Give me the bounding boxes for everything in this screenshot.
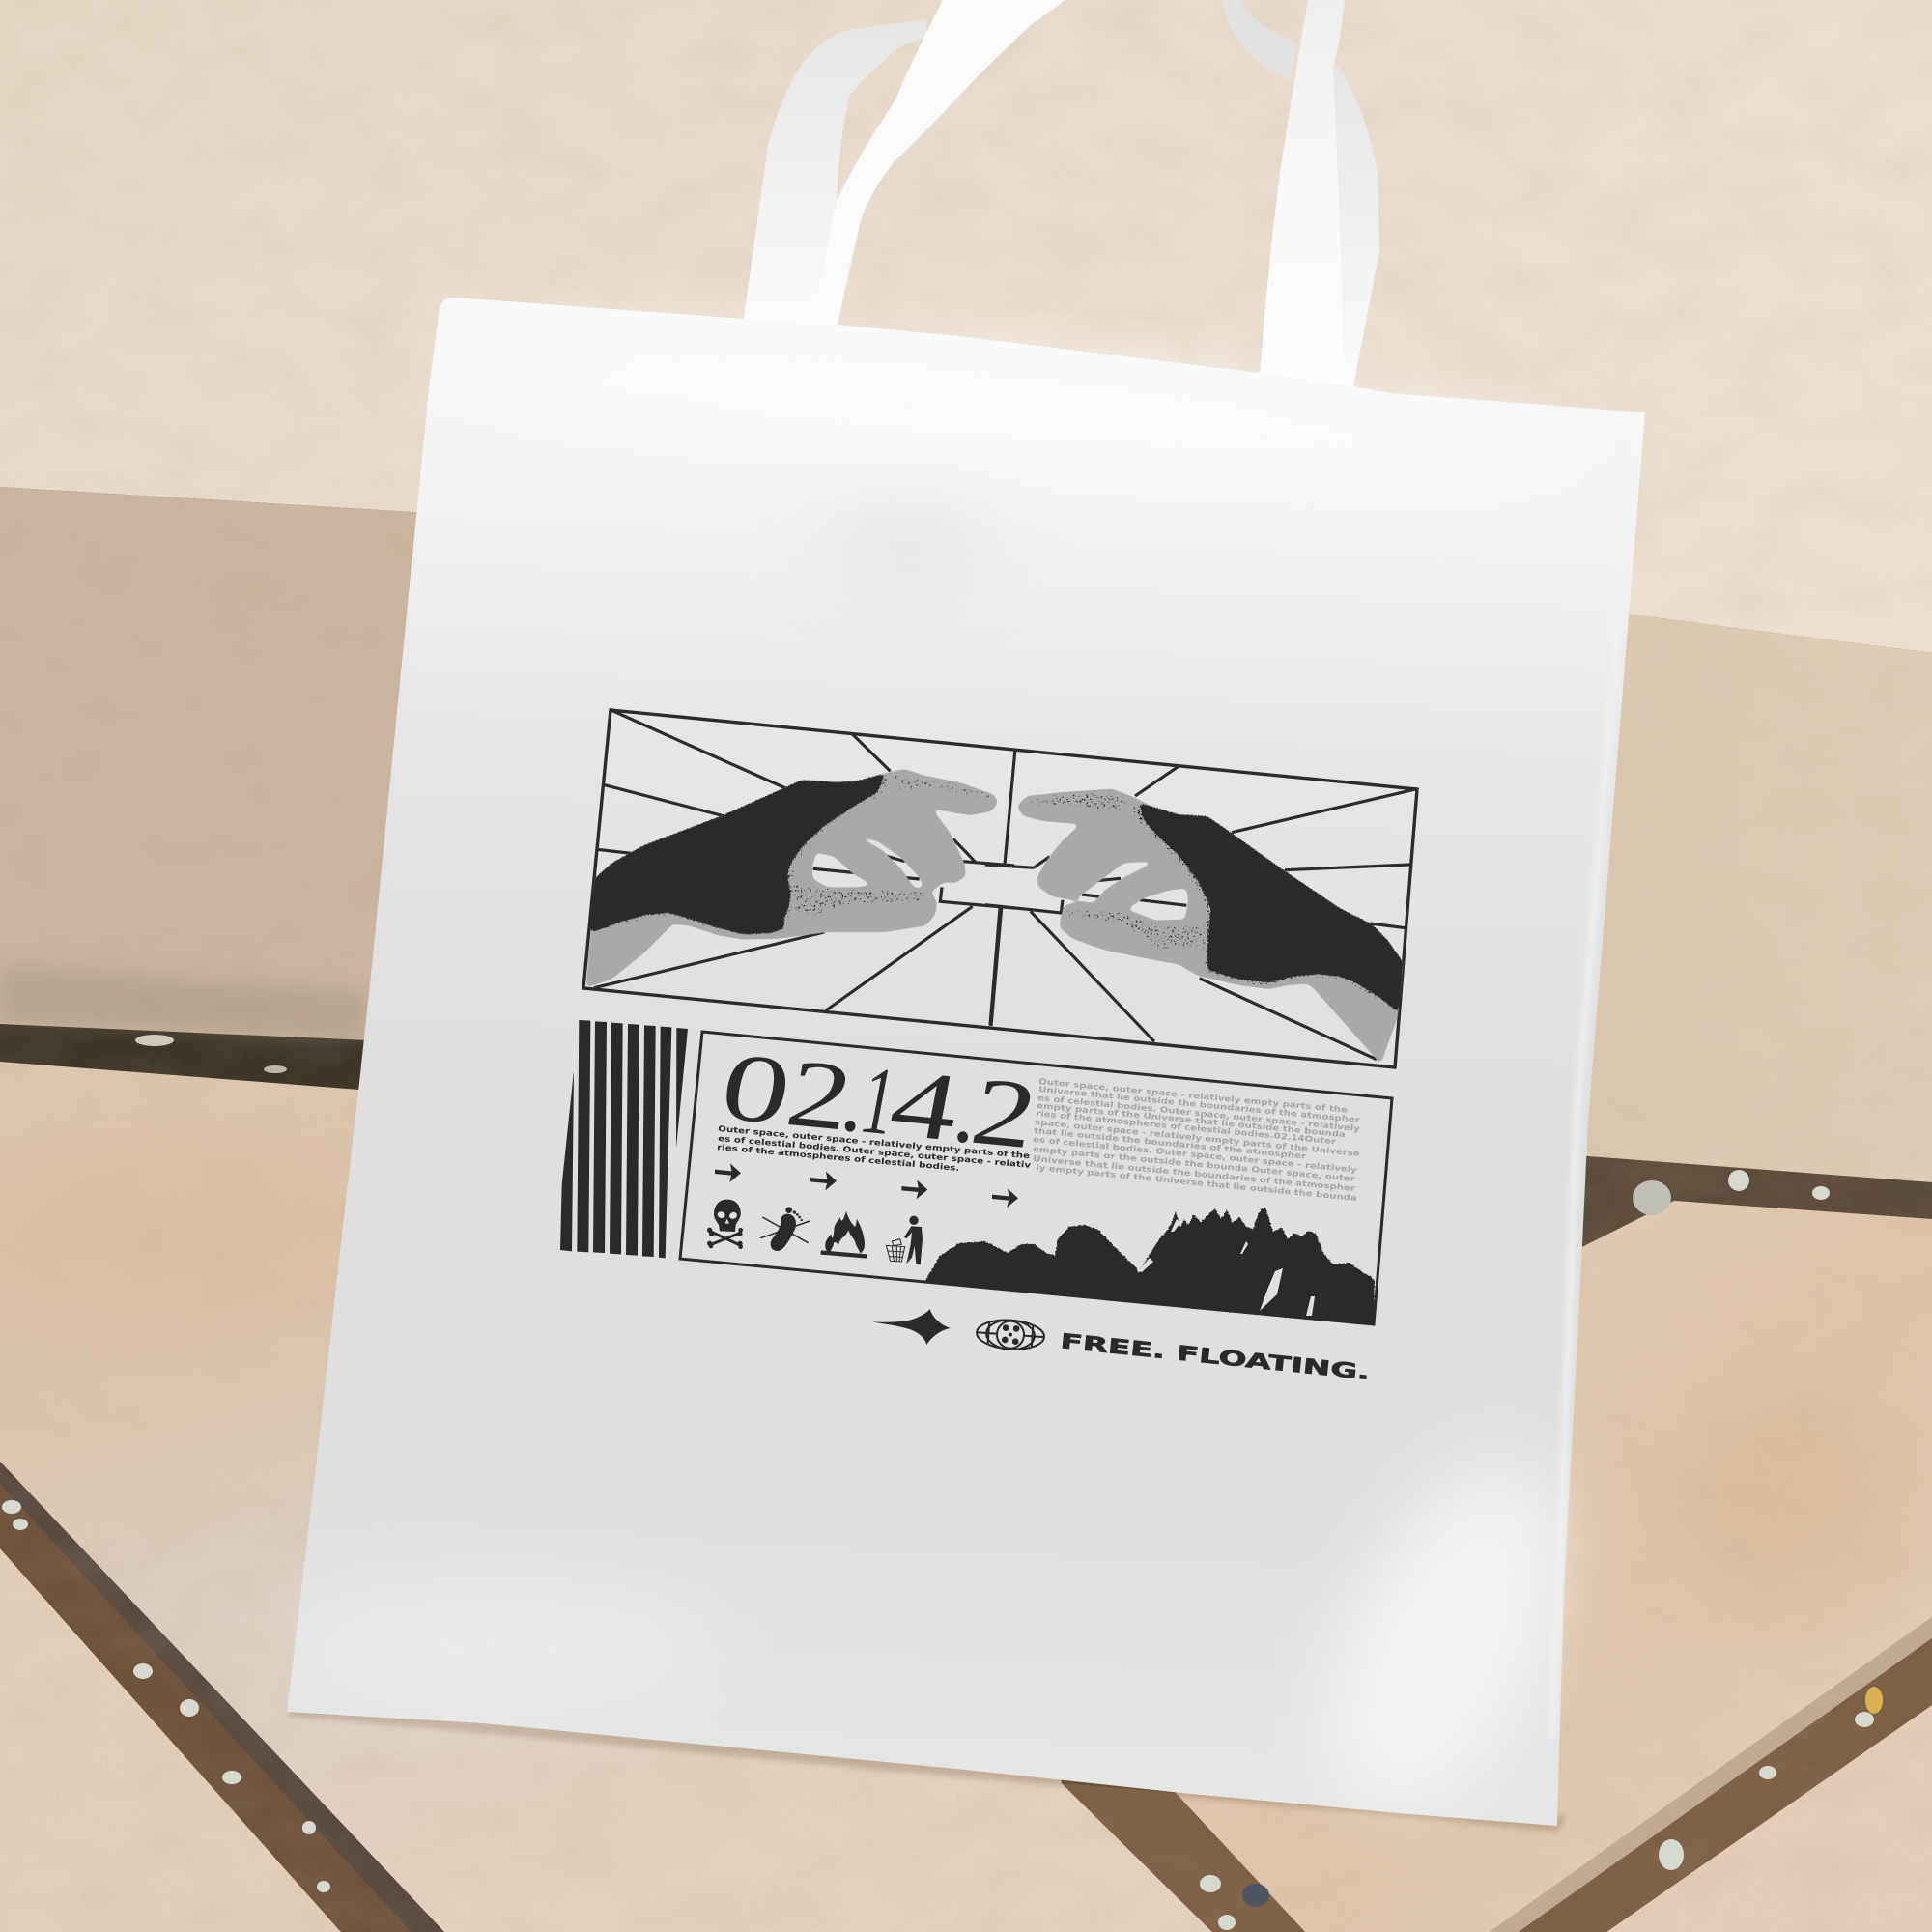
print: barcode stripes [560,1020,688,1258]
icon: flame [820,1211,867,1259]
left hand dark shadow [589,774,886,934]
date heading: . [837,1044,869,1152]
pebbles [2,1035,1883,1930]
date heading: . [950,1055,981,1164]
soil tint in lower gaps [1519,1638,1932,1932]
print: sunburst frame with hands [583,710,1417,1067]
left handle front strap [811,0,1065,328]
icon: person using bin [886,1216,923,1264]
stone grit [0,1053,1932,1932]
print: info panel outline [680,1032,1392,1324]
bottom-left paver [0,1548,341,1932]
right paver edge [1490,1617,1932,1932]
arrow 3 [901,1180,927,1199]
grey paragraph: es of celestial bodies. Outer space, outer space - relatively [1037,1093,1361,1133]
grey paragraph: ly empty parts of the Universe that lie outside the bounda [1036,1162,1357,1203]
left hand speckle [589,771,995,935]
bag shadow on ground [287,1700,1567,1832]
bag body [287,298,1645,1826]
right hand light silhouette [1017,789,1404,1065]
mountain silhouette [924,1208,1375,1325]
date heading: 2 [964,1058,1045,1169]
dark gap behind upper step [0,1014,1932,1275]
right hand dark shadow [1138,804,1404,1012]
frame outline [583,710,1417,1067]
warm patch right paver [1681,1391,1913,1623]
grey paragraph: space, outer space - relatively empty parts of the Universe [1035,1117,1361,1158]
grey paragraph: empty parts of the Universe that lie outside the bounda [1037,1100,1346,1139]
right hand [1017,789,1404,1065]
right handle front strap [1260,0,1345,391]
grey paragraph: ries of the atmospheres of celestial bodies.02.14Outer [1036,1108,1338,1146]
grey paragraph: that lie outside the boundaries of the atmospher [1034,1125,1308,1161]
left hand light silhouette [586,769,998,988]
arrow 1 [715,1163,741,1182]
logo: globe with film reel [976,1318,1045,1351]
date heading: 0 [713,1034,799,1145]
right seam [1551,464,1631,1739]
right hand speckle [1017,790,1404,1016]
arrow 2 [810,1172,837,1190]
right half rays [985,749,1417,1060]
upper step top surface [0,0,1932,653]
diagonal gap wall [0,1462,444,1932]
back handle right twist [1223,0,1296,81]
left half rays [594,710,1014,1026]
mountain highlight streaks [1138,1219,1315,1316]
logo: four-point star [872,1309,951,1345]
date heading: 2 [780,1039,861,1151]
tagline: FREE. FLOATING. [1059,1329,1371,1384]
bottom-right paver [1606,1705,1932,1932]
right paver [1176,1201,1932,1932]
grey paragraph: Universe that lie outside the boundaries of the atmospher [1033,1153,1356,1193]
grey paragraph [1033,1076,1361,1203]
bold paragraph: es of celestial bodies. Outer space, outer space - relativ [718,1133,1032,1170]
warm patch left paver [0,1140,377,1314]
icon: footprint crossed out [760,1207,810,1251]
fold shading [821,488,995,594]
left handle back strap [743,19,926,328]
grey paragraph: es of celestial bodies. Outer space, outer space - relatively [1033,1134,1358,1175]
date heading: 4 [882,1049,968,1161]
grey paragraph: Outer space, outer space - relatively empty parts of the [1038,1076,1349,1115]
date heading [713,1032,1045,1171]
highlight bottom right [1289,1428,1609,1837]
step riser [0,487,1932,1182]
bold paragraph [717,1123,1032,1173]
icon: skull and crossbones [707,1200,743,1249]
right handle back strap [1304,66,1379,391]
bold paragraph: ries of the atmospheres of celestial bodies. [717,1142,960,1173]
grey paragraph: Universe that lie outside the boundaries of the atmospher [1038,1084,1361,1124]
riser shading [0,966,367,1040]
grey paragraph: empty parts or the outside the bounda Outer space, outer [1033,1144,1356,1183]
bold paragraph: Outer space, outer space - relatively empty parts of the [718,1123,1031,1160]
highlight top hem [432,312,1597,519]
date heading: 1 [853,1047,903,1155]
highlight bottom left [280,1575,724,1710]
arrow 4 [992,1188,1018,1208]
left hand [586,769,998,988]
arrows and hazard icons [707,1163,1018,1264]
left paver [0,1062,1212,1932]
tote bag [280,0,1645,1837]
